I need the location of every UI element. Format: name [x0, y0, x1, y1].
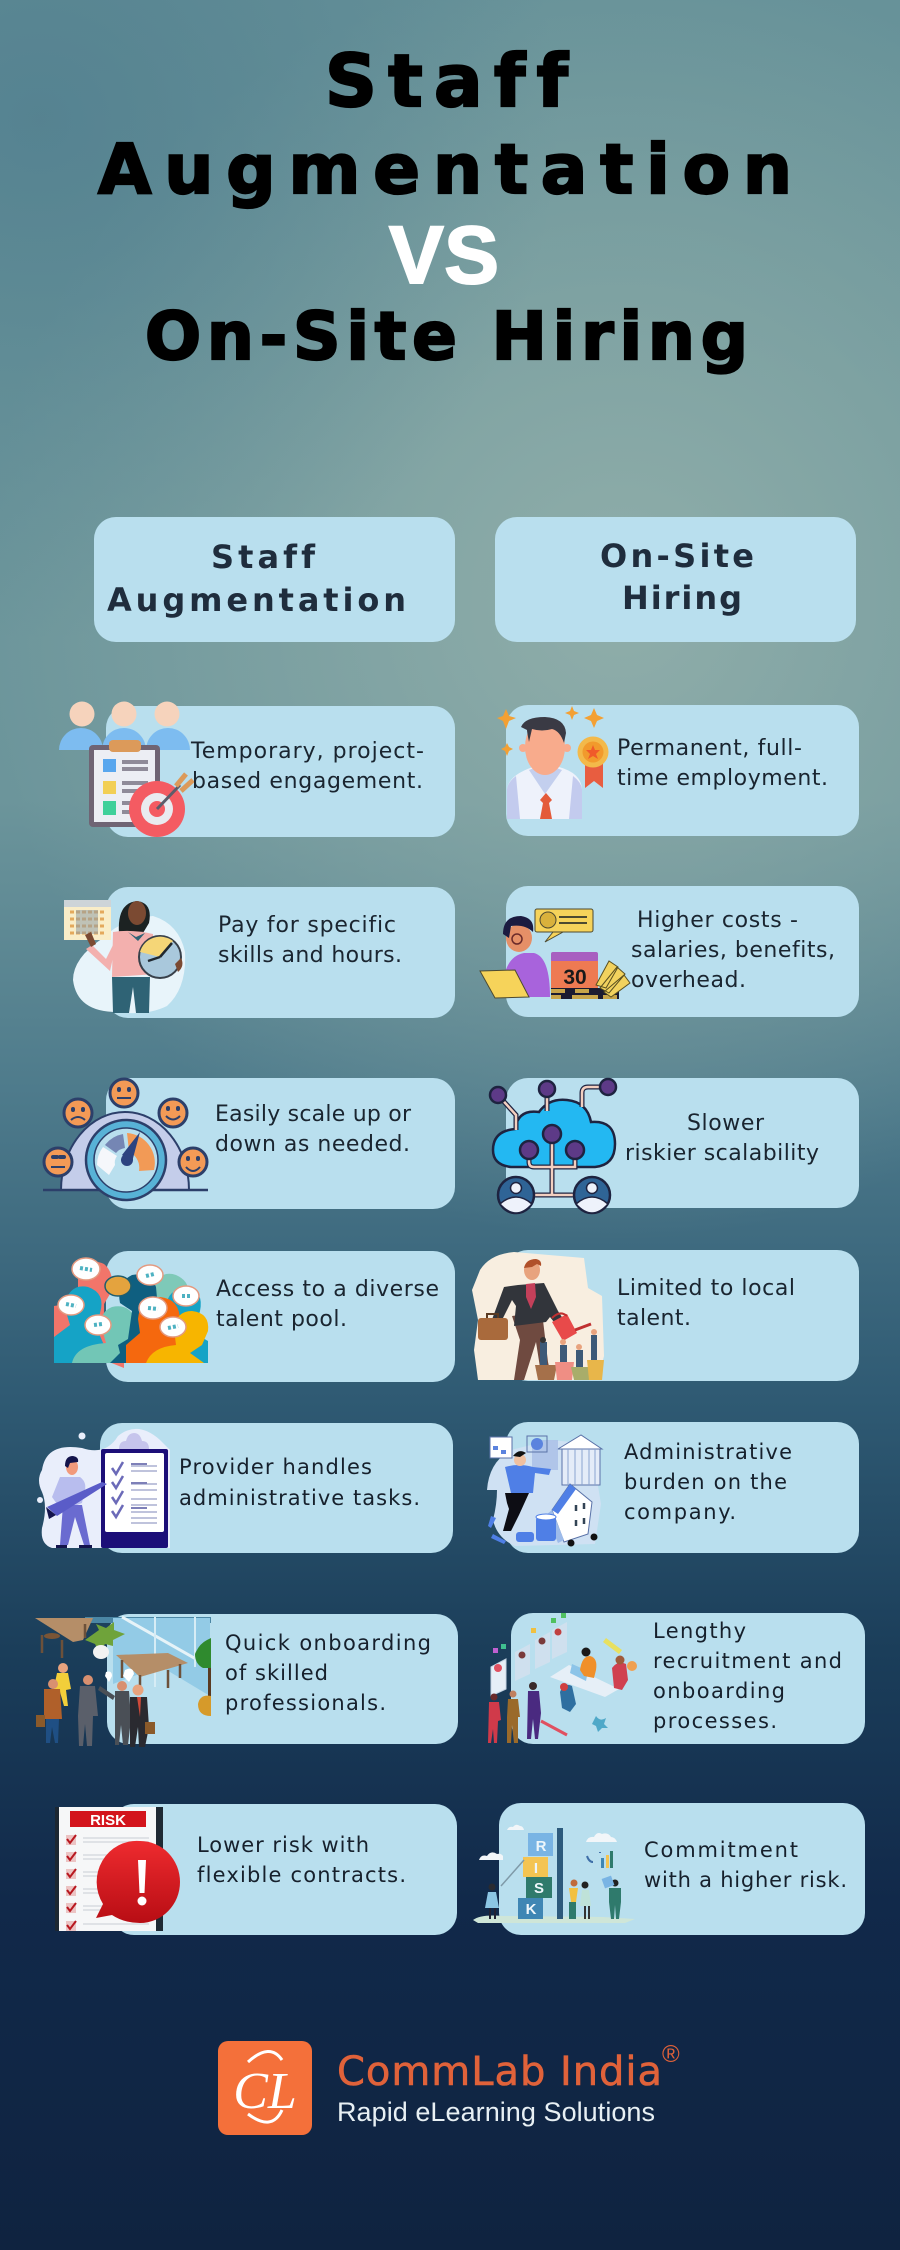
panel: lower risk	[55, 1804, 457, 1935]
icon: salary received person with calendar and cash	[480, 909, 630, 999]
panel: provider handles admin	[37, 1423, 453, 1553]
icon: risk blocks with team	[473, 1825, 635, 1923]
column heading: On-Site Hiring	[495, 517, 856, 642]
text	[644, 1838, 847, 1892]
icon: candidates queueing at interview table	[488, 1613, 637, 1743]
icon: cloud network with users	[490, 1079, 616, 1213]
icon: employee with medal	[497, 706, 608, 819]
text: Pay for specific	[218, 913, 396, 938]
icon: satisfaction gauge with faces	[43, 1079, 208, 1200]
text: Lower risk with	[197, 1833, 369, 1857]
text: administrative tasks.	[179, 1486, 420, 1510]
title: On-Site Hiring	[145, 298, 748, 375]
icon: office scene with handshake	[35, 1617, 211, 1747]
text: riskier scalability	[625, 1141, 819, 1166]
icon: team with checklist and target	[59, 702, 193, 837]
column heading: Staff Augmentation	[94, 517, 455, 642]
text: Limited to local	[617, 1276, 795, 1301]
title: Staff	[325, 39, 569, 123]
icon: risk blocks with team: S	[534, 1880, 544, 1897]
text: recruitment and	[653, 1649, 842, 1673]
text: based engagement.	[192, 769, 423, 794]
text: Commitment	[644, 1838, 798, 1862]
text: of skilled	[225, 1661, 328, 1685]
text: salaries, benefits,	[631, 938, 835, 963]
icon: manager watering small employees	[472, 1252, 604, 1380]
title: Augmentation	[98, 130, 792, 210]
icon: risk checklist with alert bubble	[55, 1807, 180, 1931]
text: Higher costs -	[637, 908, 798, 933]
panel: slower scalability	[490, 1078, 859, 1213]
icon: risk checklist with alert bubble: RISK	[90, 1812, 126, 1829]
icon: salary received person with calendar and cash: 30	[563, 966, 587, 989]
logo wordmark: CommLab India	[337, 2049, 662, 2095]
title	[98, 39, 792, 375]
icon: risk blocks with team: I	[534, 1860, 538, 1877]
icon: risk blocks with team: K	[526, 1901, 537, 1918]
text	[624, 1440, 792, 1524]
panel: permanent employment	[497, 705, 859, 836]
text: professionals.	[225, 1691, 386, 1715]
text: Administrative	[624, 1440, 792, 1464]
column heading: Staff Augmentation: Staff	[211, 538, 316, 576]
text	[225, 1631, 431, 1715]
text: Provider handles	[179, 1455, 372, 1479]
panel: diverse talent	[54, 1251, 455, 1382]
panel: temporary engagement	[59, 702, 455, 837]
logo: CommLab India	[218, 2041, 680, 2135]
text: skills and hours.	[218, 943, 402, 968]
text	[179, 1455, 420, 1510]
column heading: Staff Augmentation: Augmentation	[107, 581, 406, 619]
icon: man with giant pen and checklist	[37, 1429, 170, 1548]
text: Access to a diverse	[216, 1277, 439, 1302]
panel: higher risk commitment	[473, 1803, 865, 1935]
panel: administrative burden	[487, 1422, 859, 1553]
text	[215, 1102, 412, 1157]
text	[653, 1619, 842, 1733]
icon: diverse heads with brains	[54, 1258, 208, 1368]
text: Slower	[687, 1111, 765, 1136]
text: company.	[624, 1500, 736, 1524]
text	[216, 1277, 439, 1332]
panel: quick onboarding	[35, 1614, 458, 1747]
text	[190, 739, 424, 794]
text: Temporary, project-	[190, 739, 424, 764]
title: VS	[389, 210, 499, 301]
panel: easily scale	[43, 1078, 455, 1209]
text: overhead.	[631, 968, 746, 993]
registered mark: ®	[662, 2041, 680, 2068]
panel: higher costs	[480, 886, 859, 1017]
text: down as needed.	[215, 1132, 410, 1157]
text: talent pool.	[216, 1307, 347, 1332]
text	[625, 1111, 819, 1166]
text	[617, 1276, 795, 1331]
text: with a higher risk.	[644, 1868, 847, 1892]
icon: risk blocks with team: R	[536, 1838, 547, 1855]
text: Easily scale up or	[215, 1102, 412, 1127]
text: talent.	[617, 1306, 691, 1331]
panel: lengthy recruitment	[488, 1613, 865, 1744]
panel: pay for skills	[64, 887, 455, 1018]
text: Lengthy	[653, 1619, 746, 1643]
panel: local talent	[472, 1250, 859, 1381]
text	[631, 908, 835, 993]
text: flexible contracts.	[197, 1863, 406, 1887]
text: onboarding	[653, 1679, 785, 1703]
icon: man carrying a building on a cart	[487, 1435, 602, 1546]
icon: woman with calendar and clock	[64, 900, 185, 1013]
text	[617, 736, 828, 791]
text: Quick onboarding	[225, 1631, 431, 1655]
text: time employment.	[617, 766, 828, 791]
text	[197, 1833, 406, 1887]
text: burden on the	[624, 1470, 787, 1494]
logo mark	[218, 2041, 312, 2135]
column heading: On-Site Hiring: Hiring	[622, 579, 742, 617]
tagline: Rapid eLearning Solutions	[337, 2097, 655, 2127]
text: Permanent, full-	[617, 736, 802, 761]
text: processes.	[653, 1709, 777, 1733]
text	[218, 913, 402, 968]
column heading: On-Site Hiring: On-Site	[600, 537, 754, 575]
logo mark: CL	[233, 2063, 297, 2120]
